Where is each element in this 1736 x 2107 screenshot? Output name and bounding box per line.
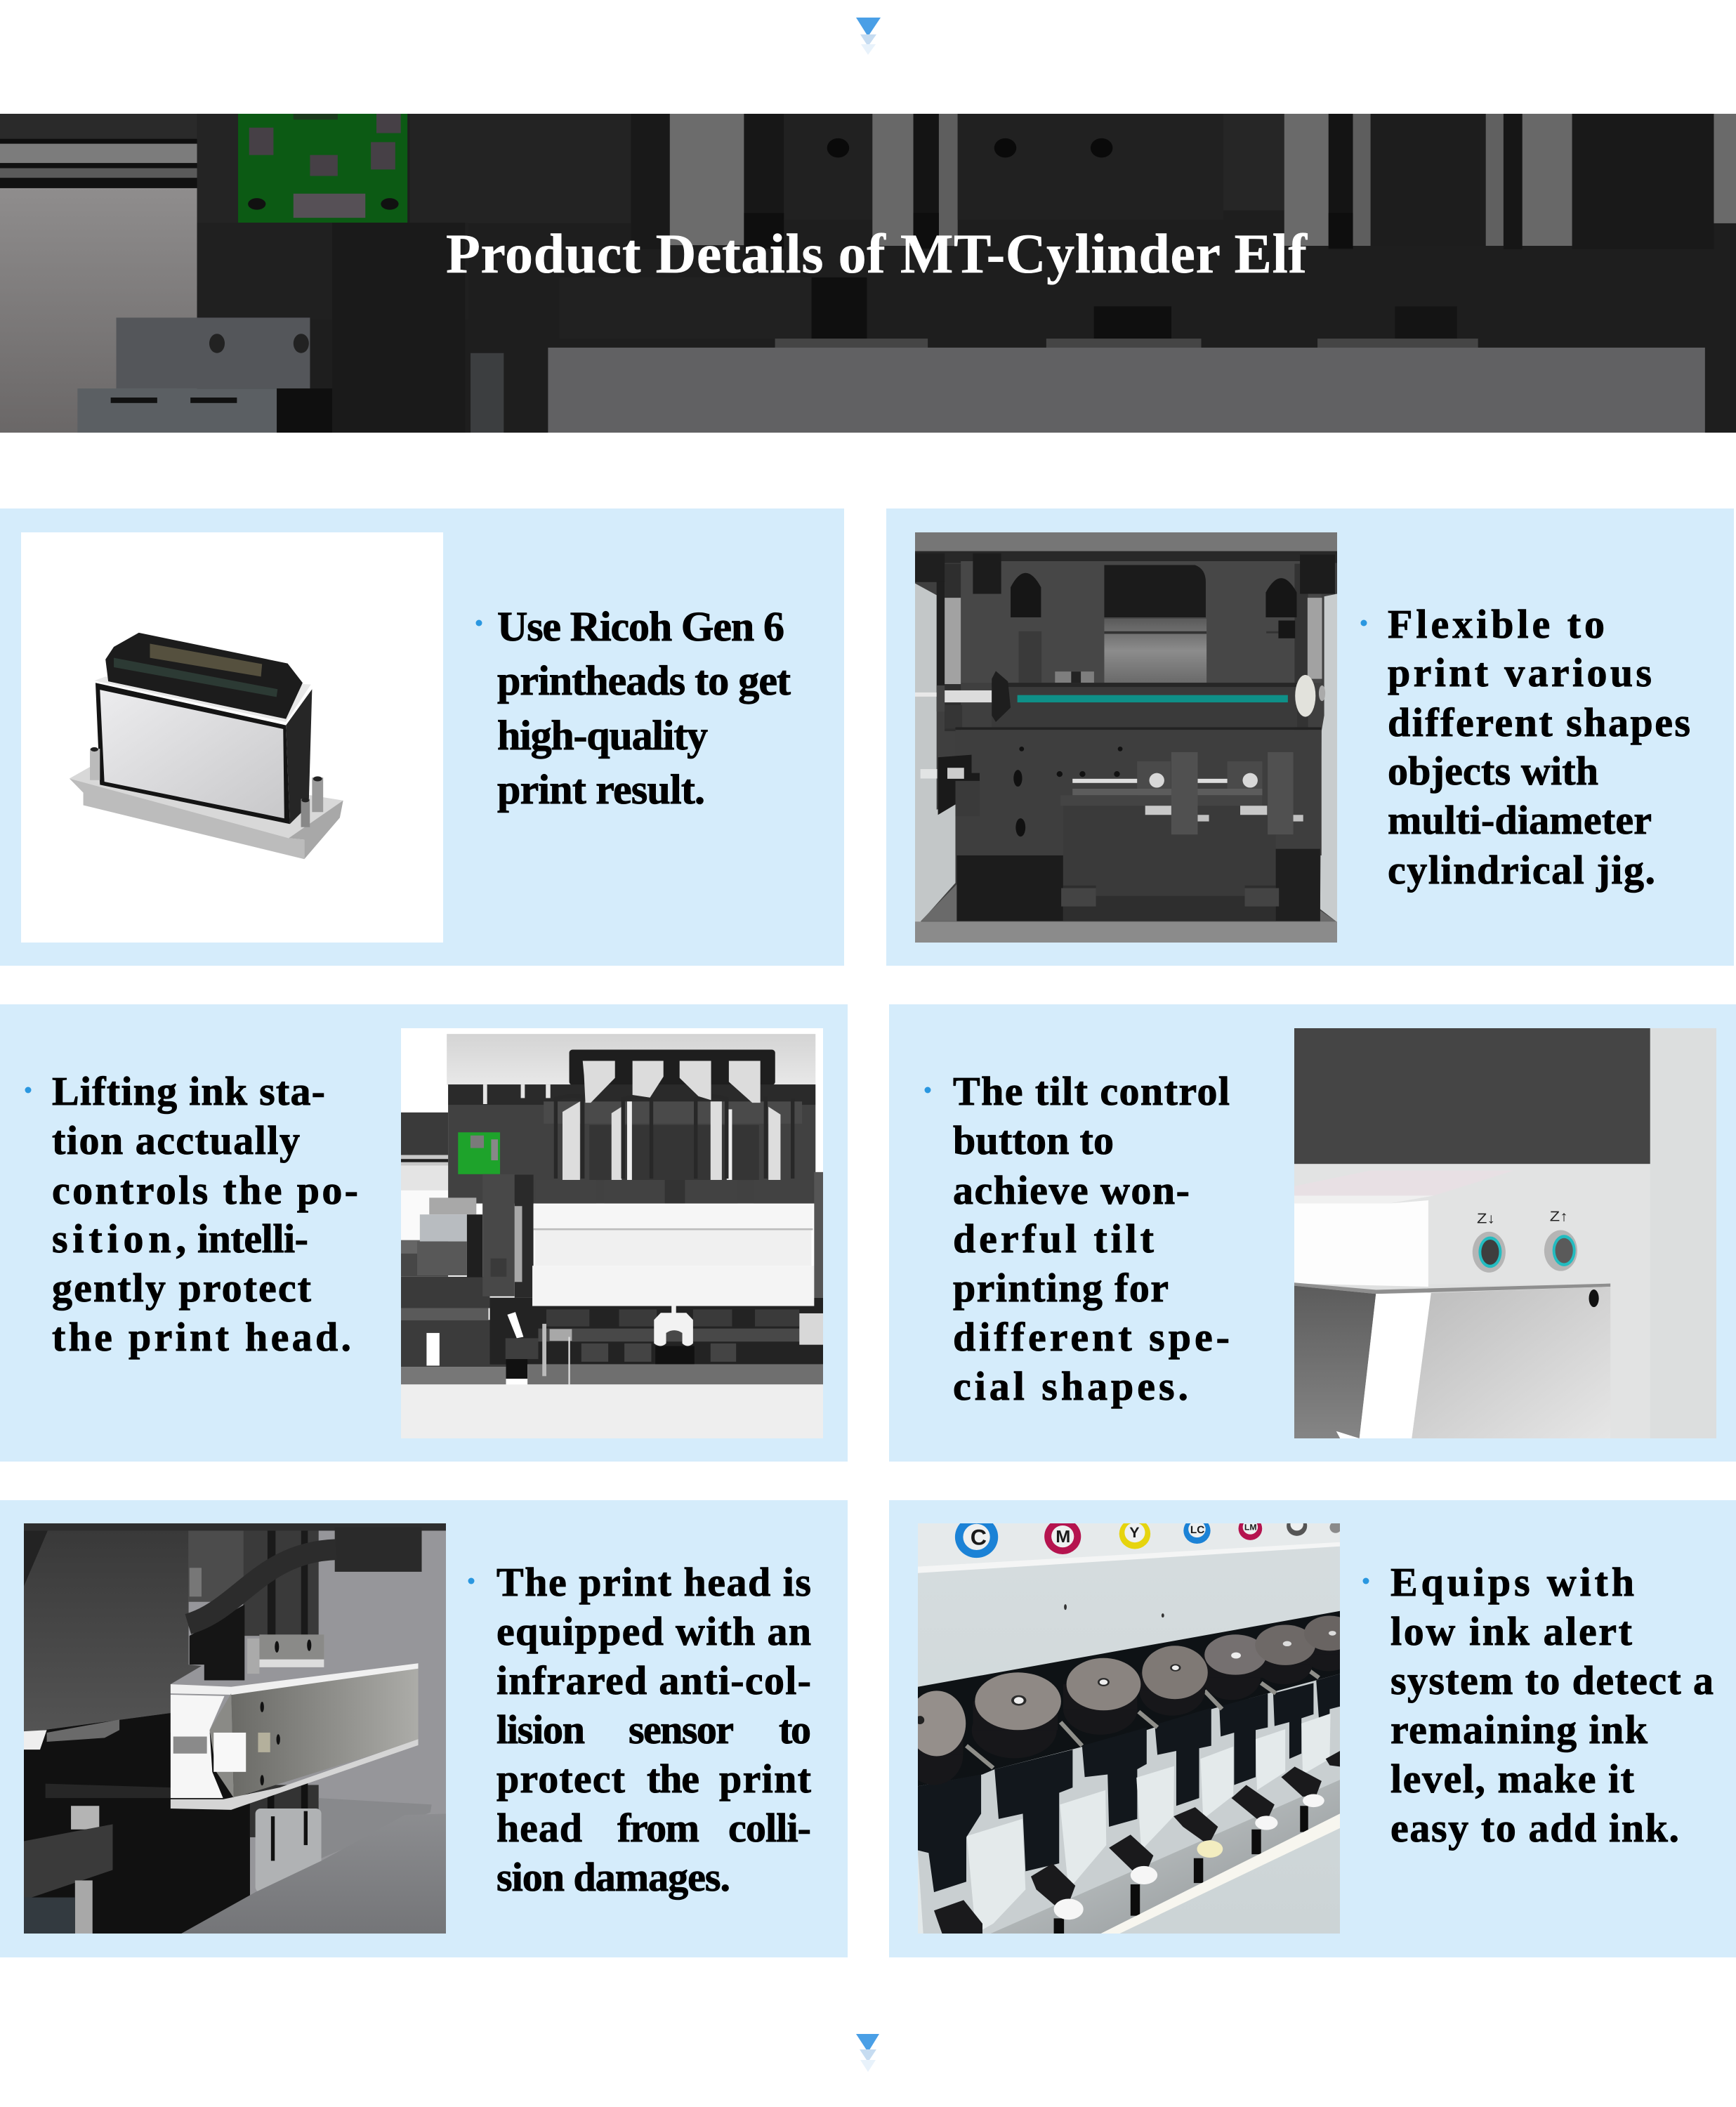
text block [497, 603, 791, 813]
panel: tilt control button [889, 1004, 1736, 1462]
bullet [924, 1087, 931, 1093]
text block: protect [497, 1756, 626, 1801]
text block: sion damages. [497, 1854, 730, 1900]
text block: the print head. [52, 1314, 351, 1360]
text block: low ink alert [1390, 1608, 1633, 1654]
text block: lision [497, 1707, 585, 1752]
text block: print [719, 1756, 812, 1801]
panel: low ink alert system [889, 1500, 1736, 1957]
text block: level, make it [1390, 1756, 1635, 1801]
text block: high-quality [497, 712, 708, 759]
text block: different shapes [1388, 700, 1690, 745]
text block [953, 1068, 1230, 1409]
image: tilt buttons on machine [1294, 1028, 1716, 1438]
bullet [1361, 619, 1367, 626]
image: tilt buttons on machine: Z↑ [1550, 1209, 1568, 1224]
bullet [25, 1087, 31, 1093]
text block: colli- [728, 1805, 811, 1851]
text block: The tilt control [953, 1068, 1230, 1114]
text block: button to [953, 1117, 1114, 1163]
text block: remaining ink [1390, 1707, 1648, 1752]
text block: from [617, 1805, 699, 1851]
image: ink bottles and colour labels: LM [1244, 1523, 1257, 1532]
image: cylindrical jig inside machine [915, 532, 1337, 943]
image: ink bottles and colour labels: LC [1190, 1524, 1204, 1536]
text block: gently protect [52, 1265, 312, 1311]
image: ink bottles and colour labels: C [971, 1525, 987, 1549]
image: ink bottles and colour labels: M [1056, 1526, 1070, 1546]
text block: tion acctually [52, 1117, 300, 1163]
text block: infrared anti-col- [497, 1658, 811, 1703]
text block: print result. [497, 766, 705, 813]
text block: Use Ricoh Gen 6 [497, 603, 784, 650]
text block: the [647, 1756, 699, 1801]
text block: controls the po- [52, 1167, 358, 1213]
bullet [476, 619, 482, 626]
bullet [1362, 1577, 1369, 1584]
image: tilt buttons on machine: Z↓ [1477, 1211, 1495, 1226]
text block [1390, 1559, 1714, 1851]
text block: to [779, 1707, 811, 1752]
text block: Flexible to [1388, 601, 1605, 647]
panel: Ricoh Gen 6 printheads [0, 508, 844, 966]
text block: equipped with an [497, 1608, 811, 1654]
text block [52, 1068, 358, 1360]
text block: sition, [52, 1216, 186, 1261]
image: ink bottles and colour labels [918, 1523, 1340, 1934]
text block: multi-diameter [1388, 797, 1652, 843]
text block [497, 1559, 812, 1900]
text block: printing for [953, 1265, 1169, 1311]
text block: intelli- [197, 1216, 308, 1261]
panel: multi-diameter cylindrical jig [886, 508, 1734, 966]
panel: lifting ink station [0, 1004, 848, 1462]
bullet [468, 1577, 475, 1584]
panel: infrared anti-collision sensor [0, 1500, 848, 1957]
text block: print various [1388, 650, 1652, 695]
text block [1388, 601, 1690, 893]
text block: cylindrical jig. [1388, 847, 1655, 893]
text block: derful tilt [953, 1216, 1155, 1261]
image: ink bottles and colour labels: Y [1129, 1524, 1140, 1541]
image: anti-collision sensor [24, 1523, 446, 1934]
text block: head [497, 1805, 582, 1851]
text block: system to detect a [1390, 1658, 1714, 1703]
text block: printheads to get [497, 657, 791, 704]
title: Product Details of MT-Cylinder Elf [446, 223, 1308, 285]
text block: cial shapes. [953, 1363, 1188, 1409]
icon: top arrow [856, 18, 881, 55]
text block: Equips with [1390, 1559, 1634, 1605]
hero background image: machine close-up [0, 114, 1736, 433]
text block: achieve won- [953, 1167, 1190, 1213]
text block: different spe- [953, 1314, 1230, 1360]
icon: bottom arrow [856, 2034, 879, 2072]
hero banner [0, 114, 1736, 433]
text block: sensor [629, 1707, 734, 1752]
text block: The print head is [497, 1559, 811, 1605]
text block: easy to add ink. [1390, 1805, 1679, 1851]
image: lifting ink station [401, 1028, 823, 1438]
text block: Lifting ink sta- [52, 1068, 325, 1114]
image: printhead [21, 532, 443, 943]
text block: objects with [1388, 748, 1598, 794]
